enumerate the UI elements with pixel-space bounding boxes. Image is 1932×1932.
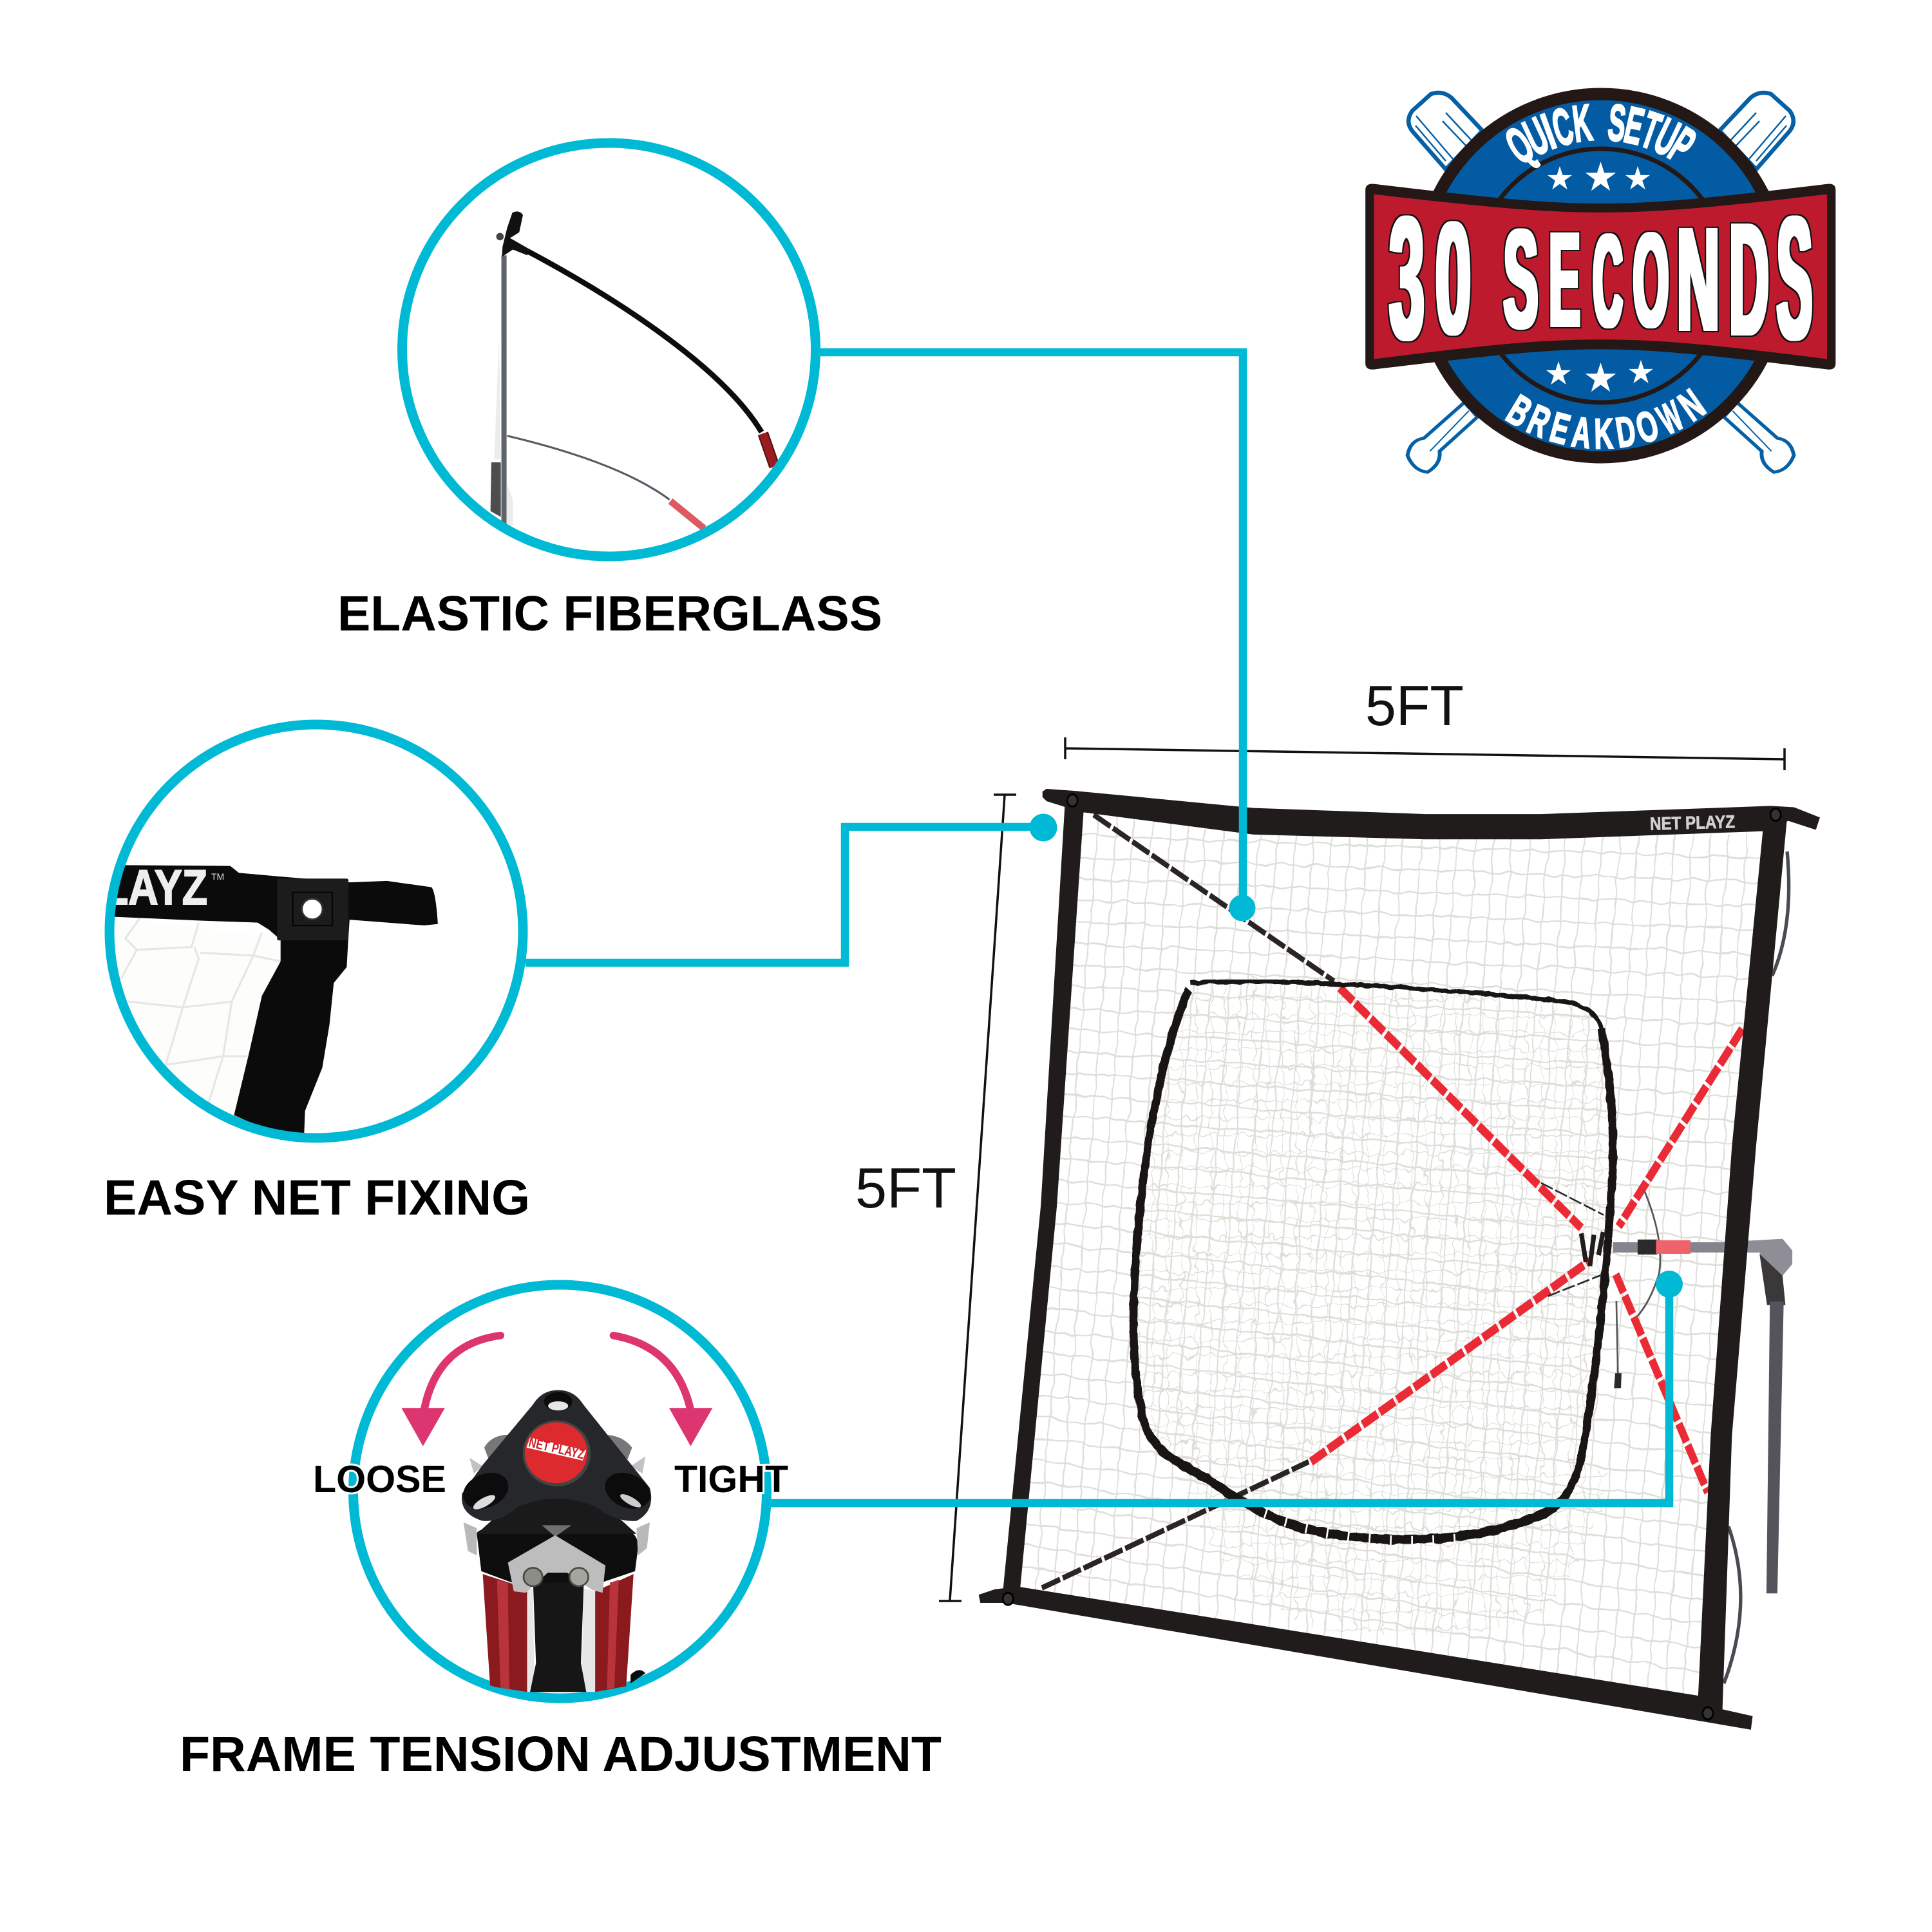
hub logo text: NET PLAYZ	[527, 1435, 586, 1463]
width label: 5FT	[1365, 674, 1464, 737]
label: tight: TIGHT	[674, 1458, 788, 1501]
breakdown arc text	[1499, 380, 1713, 458]
height dimension line	[939, 795, 1016, 1601]
brand label on net: NET PLAYZ	[1650, 811, 1735, 834]
connector: easy net fixing	[526, 814, 1057, 963]
badge: 30 seconds quick setup breakdown	[1365, 93, 1835, 472]
panel: elastic fiberglass detail	[402, 143, 815, 556]
ground stand	[1745, 1239, 1792, 1593]
banner text: 30 seconds: N	[1677, 197, 1719, 361]
quick setup arc text: C	[1546, 98, 1579, 157]
right frame band	[1698, 817, 1787, 1718]
trademark: TM	[211, 871, 224, 882]
ring	[353, 1285, 766, 1698]
banner text: 30 seconds: C	[1593, 207, 1622, 354]
hoop top edge	[1190, 981, 1602, 1029]
banner	[1365, 184, 1835, 370]
banner text: 30 seconds: 3	[1389, 182, 1425, 375]
net mesh	[1018, 814, 1765, 1697]
breakdown arc text: W	[1651, 392, 1690, 444]
bat barrels	[1408, 93, 1794, 169]
medallion	[1419, 94, 1783, 457]
label: loose: LOOSE	[313, 1458, 446, 1501]
connector: frame tension adjustment	[768, 1271, 1683, 1503]
panel: frame tension adjustment detail	[313, 1285, 788, 1698]
breakdown arc text: N	[1670, 380, 1713, 430]
red poles	[1311, 988, 1742, 1493]
quick setup arc text: E	[1620, 97, 1649, 156]
ring	[402, 143, 815, 556]
quick setup arc text: S	[1605, 94, 1629, 153]
banner text: 30 seconds: 0	[1435, 189, 1471, 366]
banner text: 30 seconds: D	[1729, 191, 1769, 368]
heading: frame tension adjustment: FRAME TENSION ADJUSTMENT	[180, 1727, 942, 1782]
net product photo	[979, 789, 1820, 1730]
quick setup arc text	[1496, 94, 1705, 175]
quick setup arc text: Q	[1496, 117, 1544, 175]
photo: net corner	[103, 860, 438, 1134]
panel: easy net fixing detail	[103, 724, 523, 1138]
breakdown arc text: K	[1594, 410, 1614, 458]
hoop bottom net ties	[1265, 1513, 1461, 1541]
banner text: 30 seconds: S	[1777, 182, 1812, 375]
fiberglass poles	[1042, 815, 1334, 1588]
ring	[109, 724, 523, 1138]
quick setup arc text: P	[1660, 117, 1705, 175]
left frame band	[1002, 804, 1084, 1602]
connector: elastic fiberglass	[818, 352, 1256, 921]
brand text on strap: LAYZ	[103, 860, 207, 915]
photo: fiberglass rods	[491, 211, 775, 528]
breakdown arc text: O	[1631, 401, 1664, 453]
banner text: 30 seconds	[1389, 182, 1812, 375]
corner bolts	[1003, 794, 1781, 1719]
medallion inner ring	[1474, 149, 1728, 402]
top frame band	[1043, 789, 1820, 839]
quick setup arc text: T	[1634, 102, 1667, 160]
top stars	[1548, 162, 1650, 191]
arrow: loosen	[401, 1336, 500, 1446]
elastic cords	[1724, 851, 1789, 1683]
bottom frame band	[979, 1587, 1752, 1730]
banner text: 30 seconds: E	[1549, 205, 1580, 354]
height label: 5FT	[855, 1156, 956, 1220]
banner text: 30 seconds: O	[1633, 206, 1669, 354]
bottom stars	[1546, 360, 1653, 392]
breakdown arc text: A	[1569, 408, 1594, 457]
hoop sides and bottom	[1133, 989, 1613, 1539]
breakdown arc text: R	[1521, 395, 1557, 447]
breakdown arc text: E	[1546, 402, 1575, 453]
breakdown arc text: D	[1613, 406, 1639, 457]
heading: easy net fixing: EASY NET FIXING	[104, 1170, 530, 1226]
quick setup arc text: K	[1569, 94, 1595, 153]
arrow: tighten	[614, 1336, 712, 1446]
photo: tension hub	[457, 1390, 656, 1692]
heading: elastic fiberglass: ELASTIC FIBERGLASS	[337, 586, 882, 641]
bat handles	[1408, 402, 1794, 472]
banner text: 30 seconds: S	[1504, 201, 1538, 357]
breakdown arc text: B	[1499, 386, 1540, 437]
quick setup arc text: U	[1646, 108, 1687, 167]
width dimension line	[1065, 737, 1785, 770]
quick setup arc text: U	[1516, 107, 1557, 167]
center hub, rod and guy wires	[1541, 1183, 1766, 1388]
pocket netting	[1133, 981, 1613, 1635]
icon: crossed baseball bats	[1408, 93, 1794, 472]
quick setup arc text: I	[1535, 102, 1562, 160]
